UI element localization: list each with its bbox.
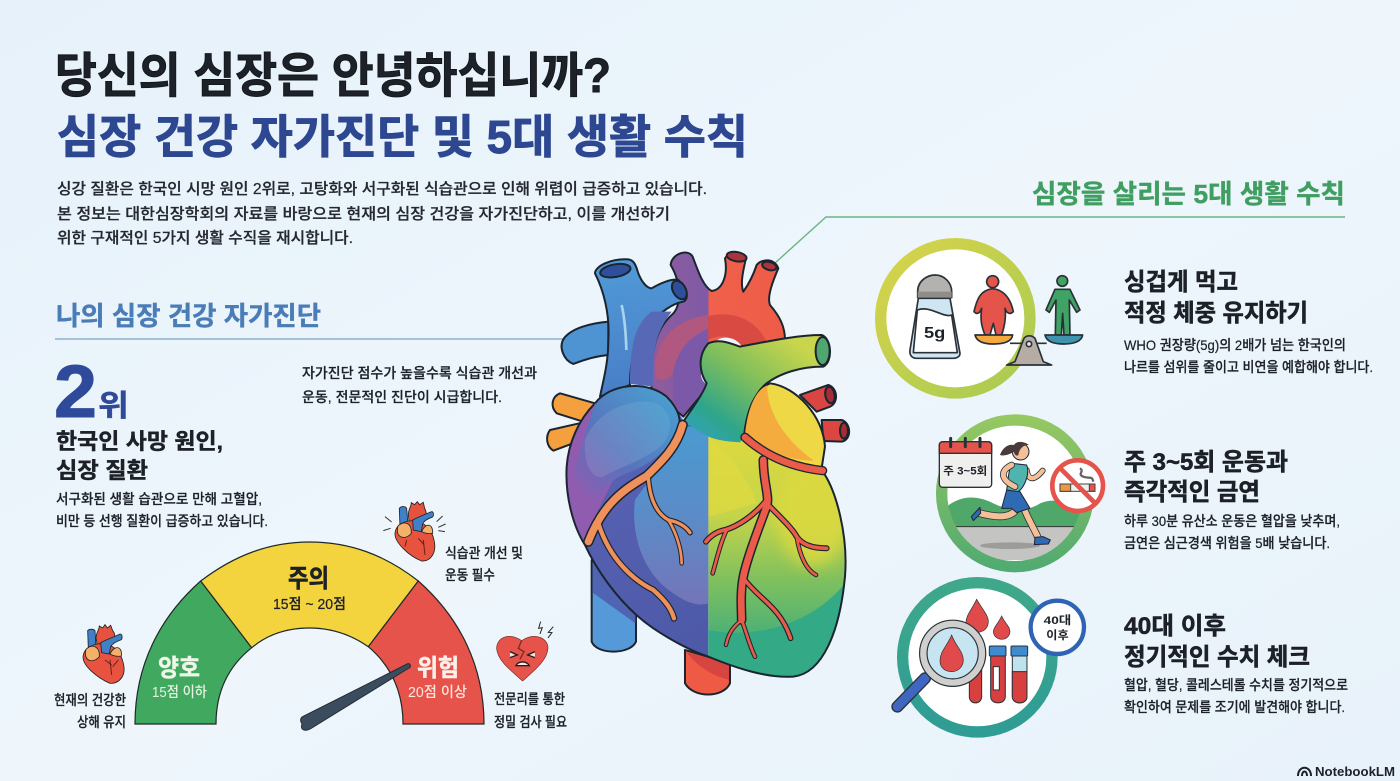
title: 심장 건강 자가진단 및 5대 생활 수칙 <box>57 111 748 163</box>
overweight figure <box>974 276 1013 344</box>
statistic: rank 2: 위 <box>98 390 129 423</box>
heart: left orange vessels <box>547 393 595 451</box>
statistic: rank 2: 한국인 사망 원인, <box>56 429 223 454</box>
rule 2 text: 금연은 심근경색 위험을 5배 낮습니다. <box>1124 535 1330 551</box>
statistic: rank 2 <box>54 350 268 529</box>
rule 1 text: 나르를 섬위를 줄이고 비연을 예합해야 합니다. <box>1124 359 1373 375</box>
text: maintain healthy state <box>54 692 126 730</box>
statistic: rank 2: 서구화된 생활 습관으로 만해 고혈압, <box>56 491 262 507</box>
gauge: labels: 15점 이하 <box>152 684 207 701</box>
text: maintain healthy state: 현재의 건강한 <box>54 692 126 708</box>
text: specialist checkup <box>494 691 567 730</box>
heart: white gaps <box>701 338 742 384</box>
text: specialist checkup: 정밀 검사 필요 <box>494 714 567 730</box>
text: diet and exercise required <box>445 545 523 583</box>
heart: pulmonary artery <box>683 335 830 442</box>
gauge: labels: 15점 ~ 20점 <box>273 596 346 613</box>
test tubes <box>969 646 1028 703</box>
gauge: labels: 20점 이상 <box>408 684 467 701</box>
rule 1 text: 싱겁게 먹고 <box>1124 269 1238 296</box>
intro text: 싱강 질환은 한국인 시망 원인 2위로, 고탕화와 서구화된 식습관으로 인해 위렵이 급증하고 있습니다. <box>57 180 707 198</box>
intro text <box>57 180 707 247</box>
icon: broken heart <box>497 622 553 681</box>
gauge: green segment <box>135 581 252 724</box>
statistic: rank 2: 2 <box>54 350 97 433</box>
calendar <box>939 438 992 487</box>
healthy figure <box>1045 276 1083 344</box>
gauge: labels: 위험 <box>417 655 459 682</box>
statistic: rank 2: 비만 등 선행 질환이 급증하고 있습니다. <box>56 513 268 529</box>
salt shaker: 5g <box>924 325 945 342</box>
balance beam and fulcrum <box>1007 336 1052 365</box>
rule 2 text: 하루 30분 유산소 운동은 혈압을 낮추며, <box>1124 513 1340 529</box>
heart: left coronary artery <box>588 425 690 618</box>
rule 1 text <box>1124 269 1373 375</box>
rule 2 text <box>1124 449 1340 551</box>
age badge <box>1031 601 1084 654</box>
rule 3 text: 확인하여 문제를 조기에 발견해야 합니다. <box>1124 699 1345 715</box>
rule 3 text: 혈압, 혈당, 콜레스테롤 수치를 정기적으로 <box>1124 677 1348 693</box>
heart: right red vessels <box>800 385 849 442</box>
text: diet and exercise required: 식습관 개선 및 <box>445 545 523 561</box>
heart: main body <box>565 404 847 678</box>
section heading: five life rules: 심장을 살리는 5대 생활 수칙 <box>1032 179 1345 209</box>
title <box>55 50 748 163</box>
runner <box>971 442 1050 545</box>
heart: right atrium <box>573 386 680 517</box>
icon: caution heart <box>383 502 446 561</box>
age badge: 이후 <box>1046 628 1069 642</box>
section heading: self diagnosis: 나의 심장 건강 자가진단 <box>56 301 321 331</box>
rule 3 text <box>1124 613 1348 715</box>
icon: healthy heart <box>83 625 124 683</box>
watermark: NotebookLM: NotebookLM <box>1315 764 1395 779</box>
central heart illustration <box>547 250 855 695</box>
text: specialist checkup: 전문리를 통한 <box>494 691 565 707</box>
gauge: yellow segment <box>201 542 418 648</box>
ring <box>903 583 1052 732</box>
heart: superior vena cava <box>595 259 690 397</box>
scenery <box>948 498 1080 560</box>
blood drops <box>966 599 1010 639</box>
intro text: 위한 구재적인 5가지 생활 수직을 재시합니다. <box>57 229 353 247</box>
age badge: 40대 <box>1044 613 1071 627</box>
gauge: labels: 양호 <box>158 655 200 682</box>
calendar: 주 3~5회 <box>943 464 987 478</box>
ring <box>881 244 1030 393</box>
rule 3 text: 40대 이후 <box>1124 613 1226 640</box>
note text: 자가진단 점수가 높을수록 식습관 개선과 <box>302 365 537 381</box>
text: maintain healthy state: 상해 유지 <box>77 714 126 730</box>
rule 2 text: 주 3~5회 운동과 <box>1124 449 1288 476</box>
intro text: 본 정보는 대한심장학회의 자료를 바랑으로 현재의 심장 건강을 자가진단하고, 이를 개선하기 <box>57 205 670 223</box>
statistic: rank 2: 심장 질환 <box>56 458 148 483</box>
ring <box>942 420 1088 567</box>
icon: exercise and no smoking <box>939 420 1103 567</box>
rule 1 text: WHO 권장량(5g)의 2배가 넘는 한국인의 <box>1124 337 1346 353</box>
gauge: red segment <box>368 581 484 724</box>
salt shaker <box>910 275 960 358</box>
gauge: needle <box>301 664 410 730</box>
heart: left blue stub <box>562 322 608 364</box>
gauge: labels <box>152 565 467 701</box>
heart: lower vessels <box>592 560 730 695</box>
rule 2 text: 즉각적인 금연 <box>1124 479 1260 506</box>
title: 당신의 심장은 안녕하십니까? <box>55 50 611 103</box>
icon: salt and weight scale <box>881 244 1083 393</box>
note text: 운동, 전문적인 진단이 시급합니다. <box>302 389 502 405</box>
icon: blood test <box>897 583 1084 732</box>
section heading: five life rules <box>775 179 1345 263</box>
heart: right coronary artery <box>706 437 827 657</box>
gauge: labels: 주의 <box>288 565 329 593</box>
text: diet and exercise required: 운동 필수 <box>445 567 495 583</box>
magnifying glass <box>897 624 982 707</box>
heart: aorta <box>651 250 785 417</box>
gauge chart <box>135 542 484 730</box>
no smoking sign <box>1052 460 1103 511</box>
rule 1 text: 적정 체중 유지하기 <box>1124 300 1308 327</box>
heart: left atrium <box>744 383 825 468</box>
note text <box>302 365 537 405</box>
rule 3 text: 정기적인 수치 체크 <box>1124 644 1310 671</box>
